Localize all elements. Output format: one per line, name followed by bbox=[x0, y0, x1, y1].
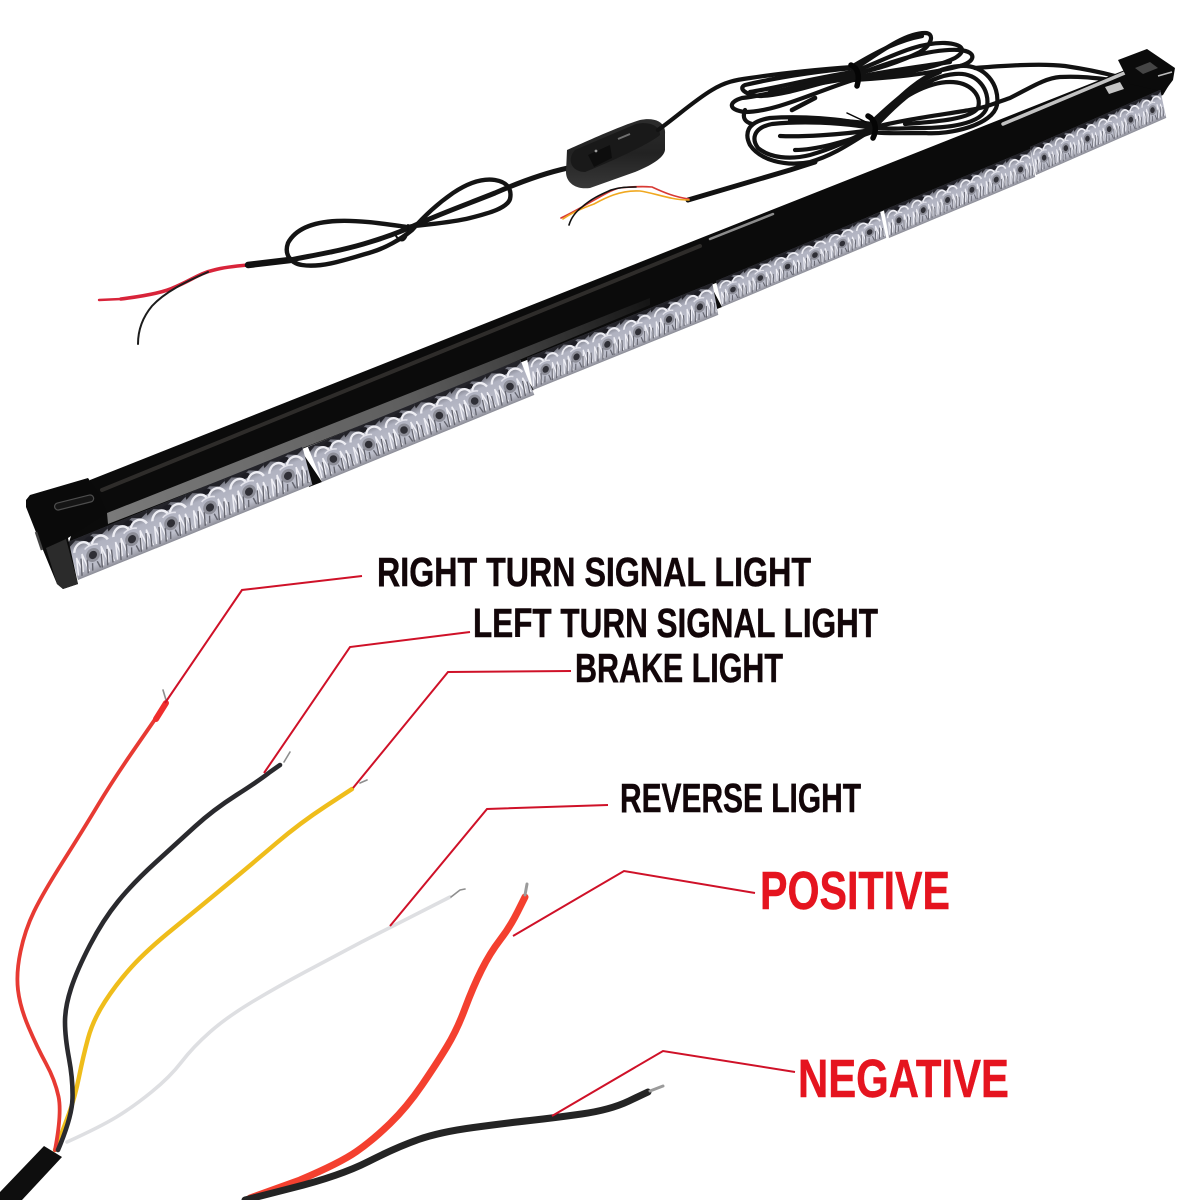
cable from switch through coiled bundles to bar bbox=[658, 33, 1115, 200]
thick negative black wire bbox=[245, 1086, 663, 1200]
mounting bracket right bbox=[1118, 49, 1175, 92]
black left turn wire bbox=[58, 765, 280, 1150]
leader line: negative bbox=[552, 1051, 795, 1116]
label: left turn signal light: LEFT TURN SIGNAL LIGHT bbox=[473, 600, 878, 646]
LED module 1 bbox=[68, 447, 312, 580]
switch housing with rocker bbox=[566, 119, 665, 188]
LED module 4 bbox=[716, 212, 886, 307]
leader line: left turn bbox=[264, 632, 470, 773]
housing top highlights bbox=[102, 72, 1127, 490]
LED module 2 bbox=[308, 360, 534, 482]
thick positive red wire bbox=[250, 884, 527, 1198]
label: brake light: BRAKE LIGHT bbox=[575, 645, 783, 691]
label: right turn signal light: RIGHT TURN SIGNAL LIGHT bbox=[377, 549, 811, 595]
red right turn wire bbox=[17, 715, 158, 1150]
outer cable sleeve bbox=[0, 1146, 62, 1200]
left end cap bbox=[26, 478, 107, 589]
yellow brake wire bbox=[55, 789, 352, 1150]
LED module 6 bbox=[1030, 90, 1166, 175]
LED module 3 bbox=[527, 283, 718, 390]
sticker on housing bbox=[1105, 82, 1124, 94]
metal wire tips bbox=[163, 690, 465, 897]
leader line: positive bbox=[513, 871, 755, 936]
small multicolour signal wires on bar cable bbox=[561, 187, 689, 225]
reflective bevel strip bbox=[107, 298, 650, 524]
label: negative: NEGATIVE bbox=[798, 1049, 1009, 1109]
leader line: right turn bbox=[165, 576, 362, 703]
leader line: reverse bbox=[390, 805, 608, 926]
bar housing bbox=[68, 70, 1172, 545]
leader line: brake bbox=[353, 671, 571, 788]
label: positive: POSITIVE bbox=[760, 861, 950, 921]
power cable with loop and stripped red and black ends bbox=[99, 168, 568, 344]
white reverse wire bbox=[67, 897, 450, 1142]
light bar assembly bbox=[26, 49, 1175, 589]
ties on cable bundles bbox=[847, 65, 875, 138]
junction shadows between LED modules bbox=[304, 288, 722, 487]
label: reverse light: REVERSE LIGHT bbox=[620, 775, 861, 821]
LED module 5 bbox=[884, 149, 1035, 238]
bundled signal wires bbox=[17, 690, 465, 1150]
